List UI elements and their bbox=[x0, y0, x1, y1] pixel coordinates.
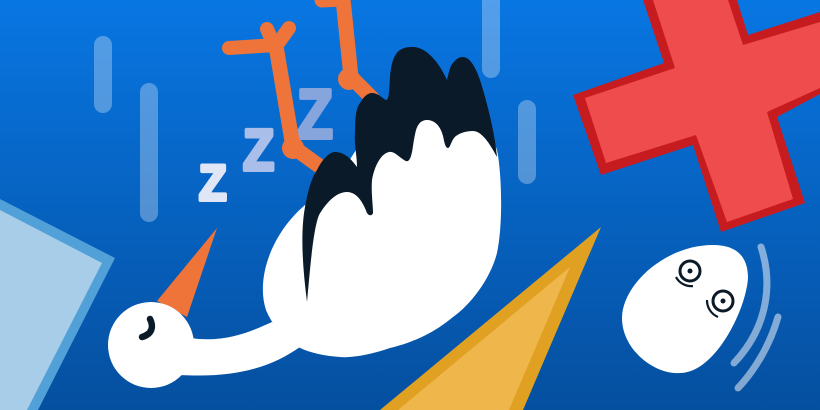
stork head bbox=[108, 302, 194, 388]
letter z medium: Z bbox=[243, 118, 274, 183]
stork closed eye bbox=[142, 319, 152, 337]
stork neck bbox=[180, 322, 300, 376]
speed lines bbox=[103, 0, 527, 213]
yellow triangle bbox=[380, 227, 601, 410]
sleeping z letters bbox=[199, 74, 333, 212]
egg shell bbox=[622, 245, 748, 373]
egg motion lines bbox=[734, 247, 778, 388]
egg eye lower bbox=[707, 291, 733, 317]
stork body bbox=[263, 80, 501, 357]
blue shape bbox=[0, 199, 115, 410]
egg eye upper bbox=[676, 261, 700, 286]
stork beak bbox=[157, 228, 217, 317]
stork black wing bbox=[302, 47, 497, 302]
red cross bbox=[573, 0, 820, 232]
letter z small: Z bbox=[199, 156, 226, 212]
dizzy egg bbox=[622, 245, 748, 373]
letter z large: Z bbox=[297, 74, 333, 153]
stork legs bbox=[229, 0, 372, 168]
